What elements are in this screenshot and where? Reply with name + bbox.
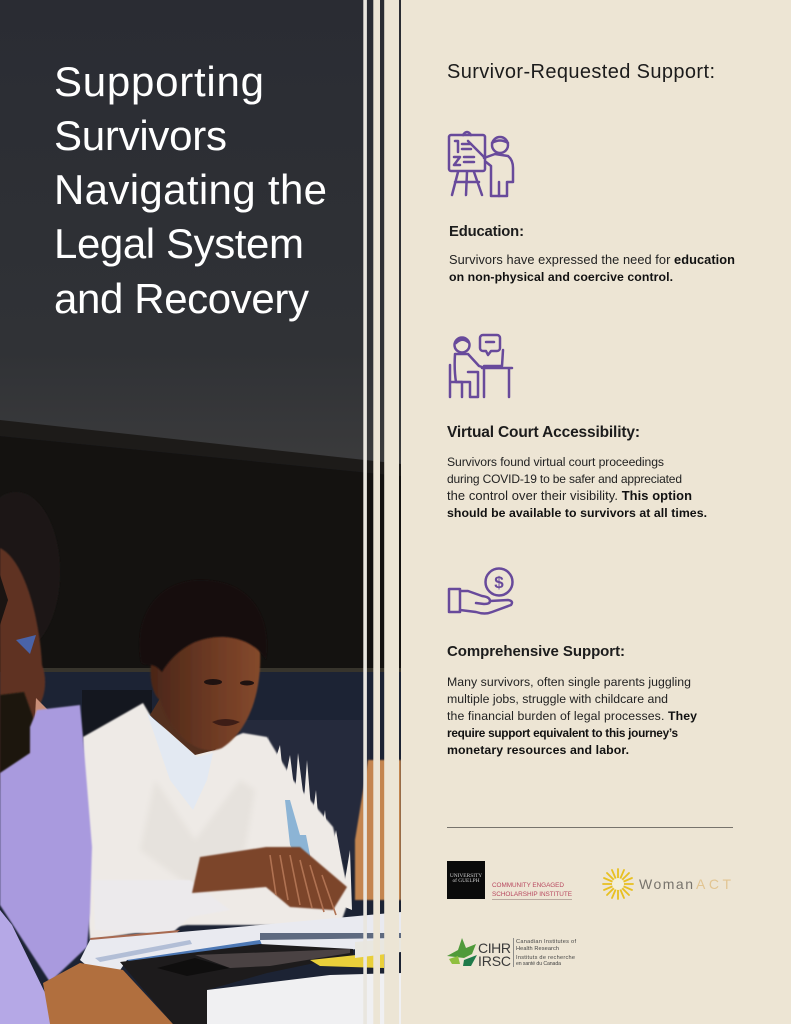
section: Virtual Court Accessibility: should be available to survivors at all times. <box>447 506 707 520</box>
logo: CIHR IRSC: Instituts de recherche <box>516 955 575 961</box>
section: Virtual Court Accessibility: Virtual Court Accessibility: <box>447 424 640 441</box>
man's purple sweater <box>0 705 92 982</box>
section: Education: on non-physical and coercive control. <box>449 270 673 284</box>
section: Comprehensive Support <box>447 643 697 757</box>
logo: CIHR IRSC: Canadian Institutes of <box>516 939 576 945</box>
logo: CIHR IRSC: Health Research <box>516 946 559 952</box>
title: Navigating the <box>54 166 327 213</box>
logo: University of Guelph Community Engaged Scholarship Institute <box>447 861 572 900</box>
logo: WomanACT <box>603 869 731 899</box>
logo: WomanACT: Woman <box>639 876 693 892</box>
logo: WomanACT: ACT <box>696 876 731 892</box>
section: Education: Education: <box>449 224 524 240</box>
vertical stripes over the photo <box>363 0 791 1024</box>
section: Comprehensive Support: monetary resources and labor. <box>447 743 629 757</box>
section: Education: Survivors have expressed the need for education <box>449 252 735 267</box>
title: Supporting <box>54 58 264 105</box>
section: Comprehensive Support: Many survivors, often single parents juggling <box>447 675 691 689</box>
logo: CIHR IRSC <box>447 938 576 969</box>
section: Virtual Court Accessibility: during COVID-19 to be safer and appreciated <box>447 472 682 486</box>
section: Virtual Court Accessibility: the control over their visibility. This option <box>447 488 692 503</box>
section: Virtual Court Accessibility: Survivors found virtual court proceedings <box>447 455 664 469</box>
section: Comprehensive Support: the financial burden of legal processes. They <box>447 709 697 723</box>
section: Education <box>449 224 735 284</box>
icon: hand holding dollar coin: $ <box>494 573 504 592</box>
icon: person at laptop with speech bubble <box>450 335 512 397</box>
logo: University of Guelph Community Engaged Scholarship Institute: of GUELPH <box>452 877 480 884</box>
logo: CIHR IRSC: IRSC <box>478 953 511 969</box>
logo: University of Guelph Community Engaged Scholarship Institute: SCHOLARSHIP INSTITUTE <box>492 891 572 898</box>
title: Legal System <box>54 220 304 267</box>
title <box>54 58 327 322</box>
icon: hand holding dollar coin <box>449 568 512 614</box>
panel: photo of women at a table <box>0 0 401 1024</box>
section: Virtual Court Accessibility <box>447 424 707 520</box>
section: Comprehensive Support: multiple jobs, struggle with childcare and <box>447 692 668 706</box>
icon: teacher at easel <box>449 132 513 196</box>
section: Comprehensive Support: require support equivalent to this journey’s <box>447 726 678 740</box>
title: Survivors <box>54 112 227 159</box>
section: Comprehensive Support: Comprehensive Support: <box>447 643 625 660</box>
heading: Survivor-Requested Support: Survivor-Requested Support: <box>447 61 715 83</box>
logo: University of Guelph Community Engaged Scholarship Institute: COMMUNITY ENGAGED <box>492 882 564 889</box>
logo: CIHR IRSC: CIHR <box>478 940 511 956</box>
logo: University of Guelph Community Engaged Scholarship Institute: UNIVERSITY <box>450 873 482 879</box>
title: and Recovery <box>54 275 309 322</box>
logo: CIHR IRSC: en santé du Canada <box>516 961 561 967</box>
